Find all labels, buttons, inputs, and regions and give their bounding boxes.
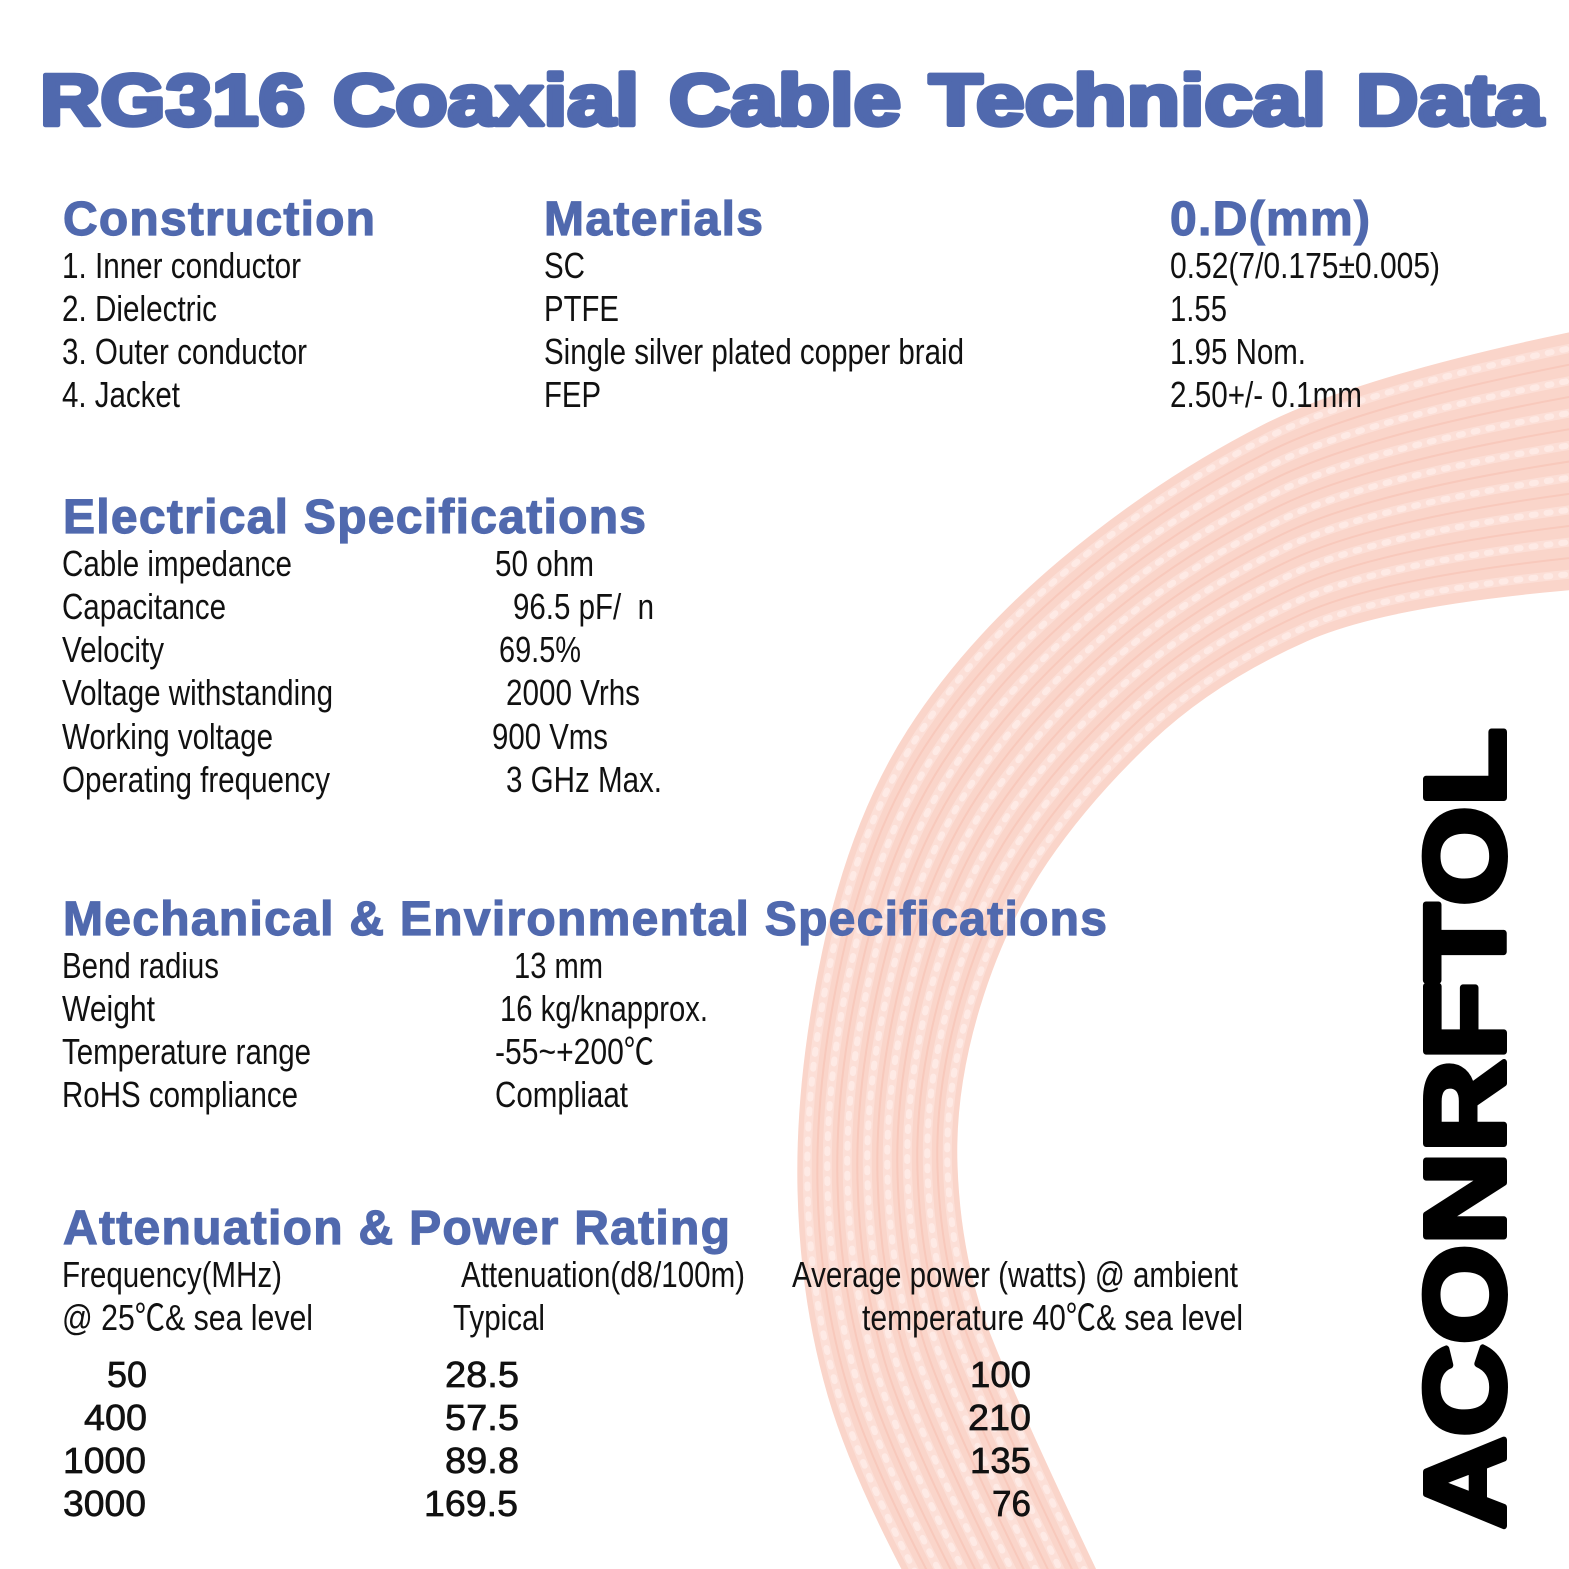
panel: electrical specifications: 69.5%	[499, 629, 581, 670]
table header: @ 25℃& sea level	[62, 1297, 313, 1338]
heading: 0.D(mm): 0.D(mm)	[1170, 193, 1370, 246]
panel: electrical specifications: Operating frequency	[62, 759, 330, 800]
table values: 135	[970, 1440, 1031, 1481]
title: Coaxial	[333, 61, 639, 141]
column: construction: 4. Jacket	[62, 374, 180, 415]
panel: electrical specifications: Velocity	[62, 629, 164, 670]
panel: mechanical and environmental specifications	[62, 893, 1107, 1115]
table values	[63, 1354, 1031, 1524]
table values: 169.5	[424, 1483, 518, 1524]
table values: 28.5	[445, 1354, 519, 1395]
panel: mechanical and environmental specifications: 16 kg/knapprox.	[500, 988, 708, 1029]
column: construction	[62, 193, 375, 415]
heading: Materials: Materials	[544, 193, 763, 246]
brand name: ACONRFTOL (vertical): ACONRFTOL	[1402, 728, 1528, 1529]
panel: attenuation and power rating	[62, 1202, 1243, 1524]
title: RG316	[40, 61, 305, 141]
heading: Attenuation & Power Rating: Attenuation & Power Rating	[63, 1202, 730, 1255]
panel: electrical specifications: Cable impedance	[62, 543, 292, 584]
column: materials: Single silver plated copper braid	[544, 331, 964, 372]
column: construction: 1. Inner conductor	[62, 245, 301, 286]
table values: 400	[84, 1397, 147, 1438]
panel: electrical specifications: 2000 Vrhs	[506, 672, 640, 713]
column: materials: PTFE	[544, 288, 619, 329]
panel: electrical specifications	[62, 491, 662, 800]
panel: electrical specifications: 900 Vms	[492, 716, 608, 757]
panel: mechanical and environmental specifications: Temperature range	[62, 1031, 311, 1072]
panel: mechanical and environmental specifications: RoHS compliance	[62, 1074, 298, 1115]
table values: 89.8	[445, 1440, 519, 1481]
table header: Attenuation(d8/100m)	[461, 1254, 745, 1295]
panel: electrical specifications: 96.5 pF/ n	[513, 586, 654, 627]
heading: Construction: Construction	[63, 193, 375, 246]
column: construction: 2. Dielectric	[62, 288, 217, 329]
panel: construction table	[62, 193, 1440, 415]
title	[40, 61, 1544, 141]
column: materials: FEP	[544, 374, 601, 415]
column: outer diameter: 0.52(7/0.175±0.005)	[1170, 245, 1440, 286]
column: outer diameter: 1.55	[1170, 288, 1227, 329]
table values: 3000	[63, 1483, 146, 1524]
heading: Electrical Specifications: Electrical Specifications	[63, 491, 646, 544]
cable coil image: pink braided cable arc	[797, 318, 1569, 1569]
column: outer diameter: 1.95 Nom.	[1170, 331, 1306, 372]
column: construction: 3. Outer conductor	[62, 331, 307, 372]
panel: electrical specifications: Voltage withstanding	[62, 672, 333, 713]
panel: mechanical and environmental specifications: 13 mm	[514, 945, 603, 986]
heading: Mechanical & Environmental Specifications: Mechanical & Environmental Specifications	[63, 893, 1107, 946]
table values: 210	[968, 1397, 1031, 1438]
table header: Typical	[453, 1297, 545, 1338]
title: Cable	[669, 61, 901, 141]
panel: mechanical and environmental specifications: -55~+200℃	[495, 1031, 654, 1072]
panel: mechanical and environmental specifications: Compliaat	[495, 1074, 628, 1115]
panel: electrical specifications: 3 GHz Max.	[506, 759, 662, 800]
panel: electrical specifications: Working voltage	[62, 716, 273, 757]
table values: 100	[970, 1354, 1031, 1395]
table header: Frequency(MHz)	[62, 1254, 282, 1295]
title: Technical	[929, 61, 1326, 141]
table values: 50	[107, 1354, 147, 1395]
table values: 76	[992, 1483, 1031, 1524]
column: outer diameter	[1170, 193, 1440, 415]
column: materials: SC	[544, 245, 585, 286]
table header	[62, 1254, 1243, 1338]
table values: 1000	[63, 1440, 146, 1481]
table header: temperature 40℃& sea level	[862, 1297, 1243, 1338]
column: materials	[544, 193, 964, 415]
title: Data	[1356, 61, 1544, 141]
table values: 57.5	[445, 1397, 519, 1438]
table header: Average power (watts) @ ambient	[792, 1254, 1238, 1295]
panel: mechanical and environmental specifications: Bend radius	[62, 945, 219, 986]
panel: electrical specifications: Capacitance	[62, 586, 226, 627]
panel: electrical specifications: 50 ohm	[495, 543, 594, 584]
column: outer diameter: 2.50+/- 0.1mm	[1170, 374, 1362, 415]
panel: mechanical and environmental specifications: Weight	[62, 988, 155, 1029]
